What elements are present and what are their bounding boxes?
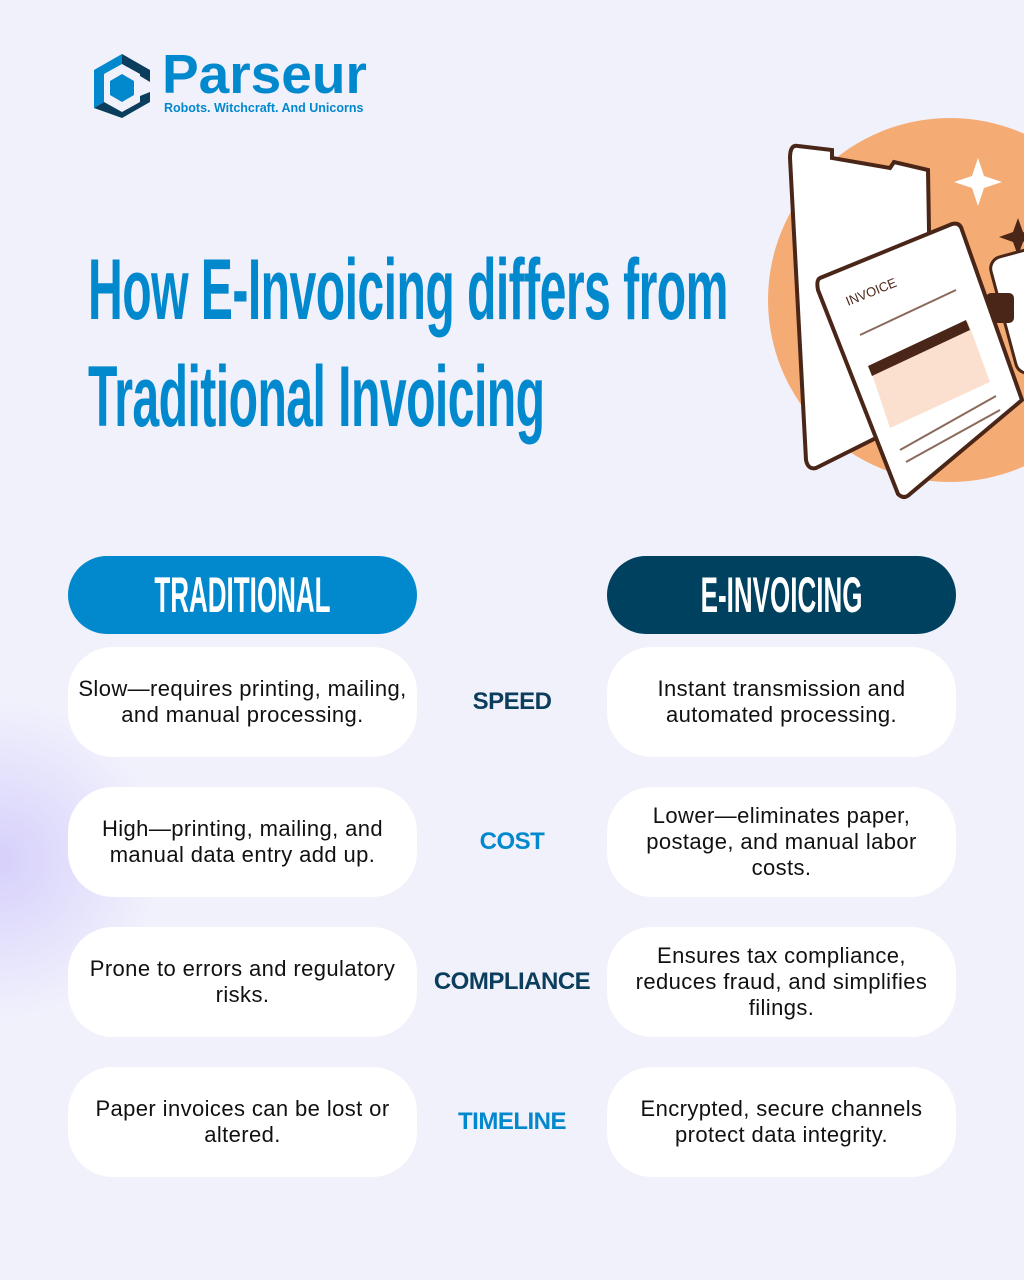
label: cost: COST (480, 828, 544, 855)
card: traditional speed (68, 647, 417, 757)
card: traditional compliance: Prone to errors and regulatory (90, 956, 395, 981)
card: e-invoicing compliance: Ensures tax compliance, (657, 943, 906, 968)
card: e-invoicing compliance (607, 927, 956, 1037)
card: e-invoicing timeline: Encrypted, secure channels (641, 1096, 922, 1121)
card: e-invoicing timeline (607, 1067, 956, 1177)
card: e-invoicing cost (607, 787, 956, 897)
row: speed (68, 647, 956, 757)
card: e-invoicing compliance: reduces fraud, and simplifies (636, 969, 927, 994)
pill: e-invoicing header (607, 556, 956, 634)
card: traditional cost: manual data entry add up. (110, 842, 375, 867)
card: traditional cost: High—printing, mailing, and (102, 816, 383, 841)
card: e-invoicing speed: Instant transmission and (657, 676, 906, 701)
logo (94, 43, 367, 118)
illustration: invoice and phone: INVOICE (844, 275, 899, 309)
tagline: Robots. Witchcraft. And Unicorns (164, 101, 363, 115)
card: traditional cost (68, 787, 417, 897)
card: traditional timeline: altered. (204, 1122, 281, 1147)
title (88, 242, 728, 445)
card: traditional timeline: Paper invoices can be lost or (95, 1096, 390, 1121)
pill: e-invoicing header: E-INVOICING (701, 567, 862, 623)
row: compliance (68, 927, 956, 1037)
pill: traditional header (68, 556, 417, 634)
pill: traditional header: TRADITIONAL (154, 567, 331, 623)
title: Traditional Invoicing (88, 349, 545, 445)
card: traditional timeline (68, 1067, 417, 1177)
row: timeline (68, 1067, 956, 1177)
card: e-invoicing cost: costs. (752, 855, 811, 880)
card: e-invoicing speed: automated processing. (666, 702, 897, 727)
card: traditional speed: Slow—requires printing, mailing, (78, 676, 407, 701)
title: How E-Invoicing differs from (88, 242, 728, 338)
card: e-invoicing cost: Lower—eliminates paper, (653, 803, 910, 828)
card: e-invoicing cost: postage, and manual labor (646, 829, 917, 854)
icon: parseur cube (94, 54, 150, 118)
card: traditional compliance (68, 927, 417, 1037)
card: e-invoicing timeline: protect data integrity. (675, 1122, 888, 1147)
label: compliance: COMPLIANCE (434, 968, 590, 995)
label: speed: SPEED (473, 688, 551, 715)
illustration: invoice and phone (768, 118, 1024, 500)
brand name: Parseur (162, 43, 367, 105)
row: cost (68, 787, 956, 897)
label: timeline: TIMELINE (458, 1108, 566, 1135)
card: traditional compliance: risks. (216, 982, 269, 1007)
card: e-invoicing speed (607, 647, 956, 757)
card: e-invoicing compliance: filings. (749, 995, 814, 1020)
card: traditional speed: and manual processing. (121, 702, 364, 727)
